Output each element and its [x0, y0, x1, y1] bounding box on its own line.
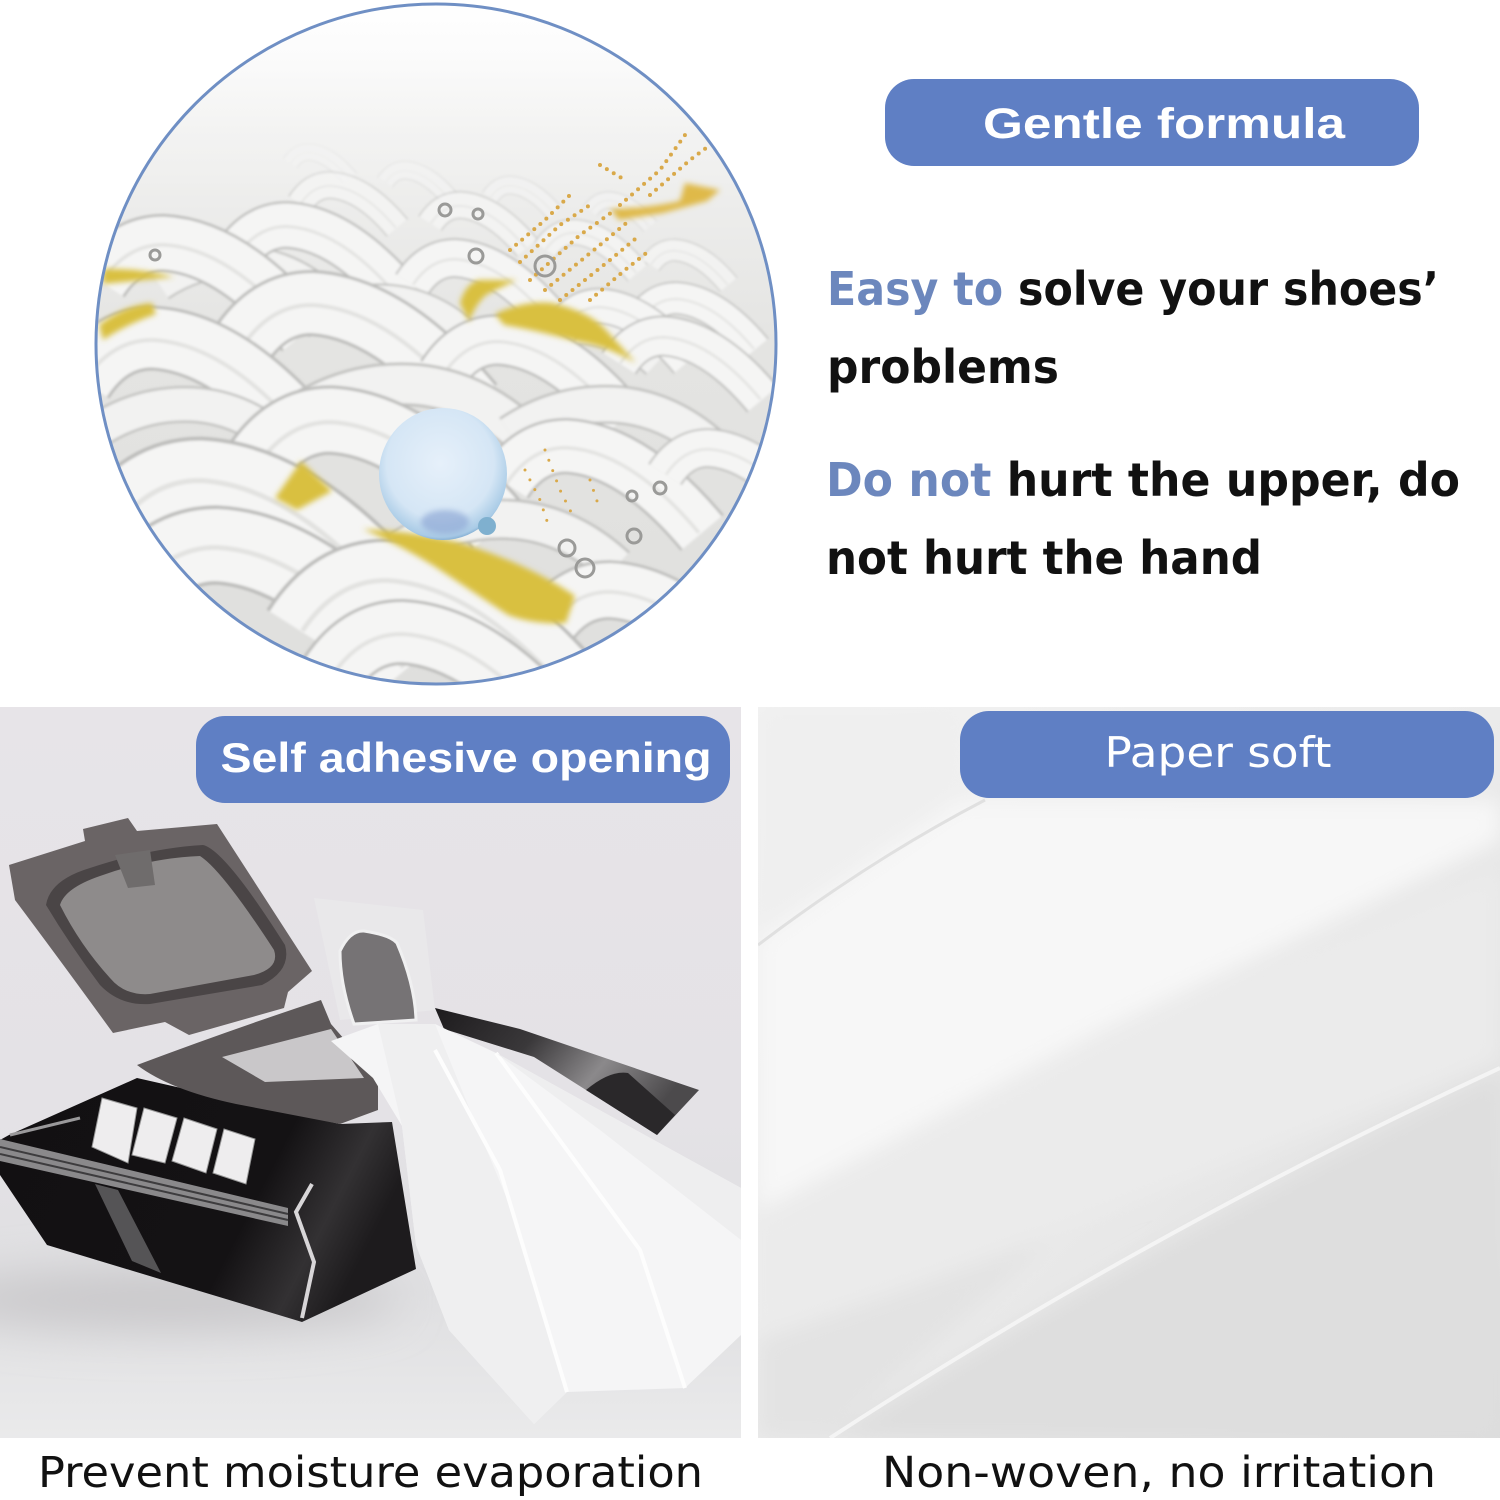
text block: do not hurt: not hurt the hand: [826, 531, 1262, 585]
open lid: [9, 818, 312, 1035]
yellow stains: [99, 183, 720, 623]
text block: easy to solve: [827, 262, 1439, 394]
bubbles: [150, 204, 666, 577]
dirt particles: [510, 135, 710, 530]
text block: easy to solve: Easy to solve your shoes’: [827, 262, 1439, 316]
panel: self adhesive opening photo: [0, 707, 741, 1438]
panel: paper soft photo: [758, 707, 1500, 1438]
base frame on packet: [137, 1000, 378, 1124]
packet body: [0, 1078, 416, 1322]
badge: self adhesive opening: Self adhesive opening: [220, 734, 712, 781]
caption: prevent moisture evaporation: Prevent moisture evaporation: [38, 1448, 703, 1498]
back side of packet: [435, 1008, 699, 1135]
text block: do not hurt: [826, 453, 1460, 585]
badge: paper soft: [960, 711, 1494, 798]
wipe sheet: [331, 1024, 741, 1424]
badge: Gentle formula: Gentle formula: [983, 100, 1346, 148]
badge: self adhesive opening: [196, 716, 730, 803]
text block: do not hurt: Do not hurt the upper, do: [826, 453, 1460, 507]
woven strands: [98, 170, 772, 682]
faint wipe backdrop: [314, 898, 435, 1020]
caption: non-woven: Non-woven, no irritation: [882, 1448, 1436, 1498]
pack label icons: [92, 1098, 255, 1184]
text block: easy to solve: problems: [827, 340, 1059, 394]
icon: water drop: [379, 408, 507, 540]
wipe tab: [340, 931, 416, 1024]
panel: fabric weave circle: [98, 90, 774, 682]
badge: Gentle formula: [885, 79, 1419, 166]
badge: paper soft: Paper soft: [1104, 728, 1332, 777]
